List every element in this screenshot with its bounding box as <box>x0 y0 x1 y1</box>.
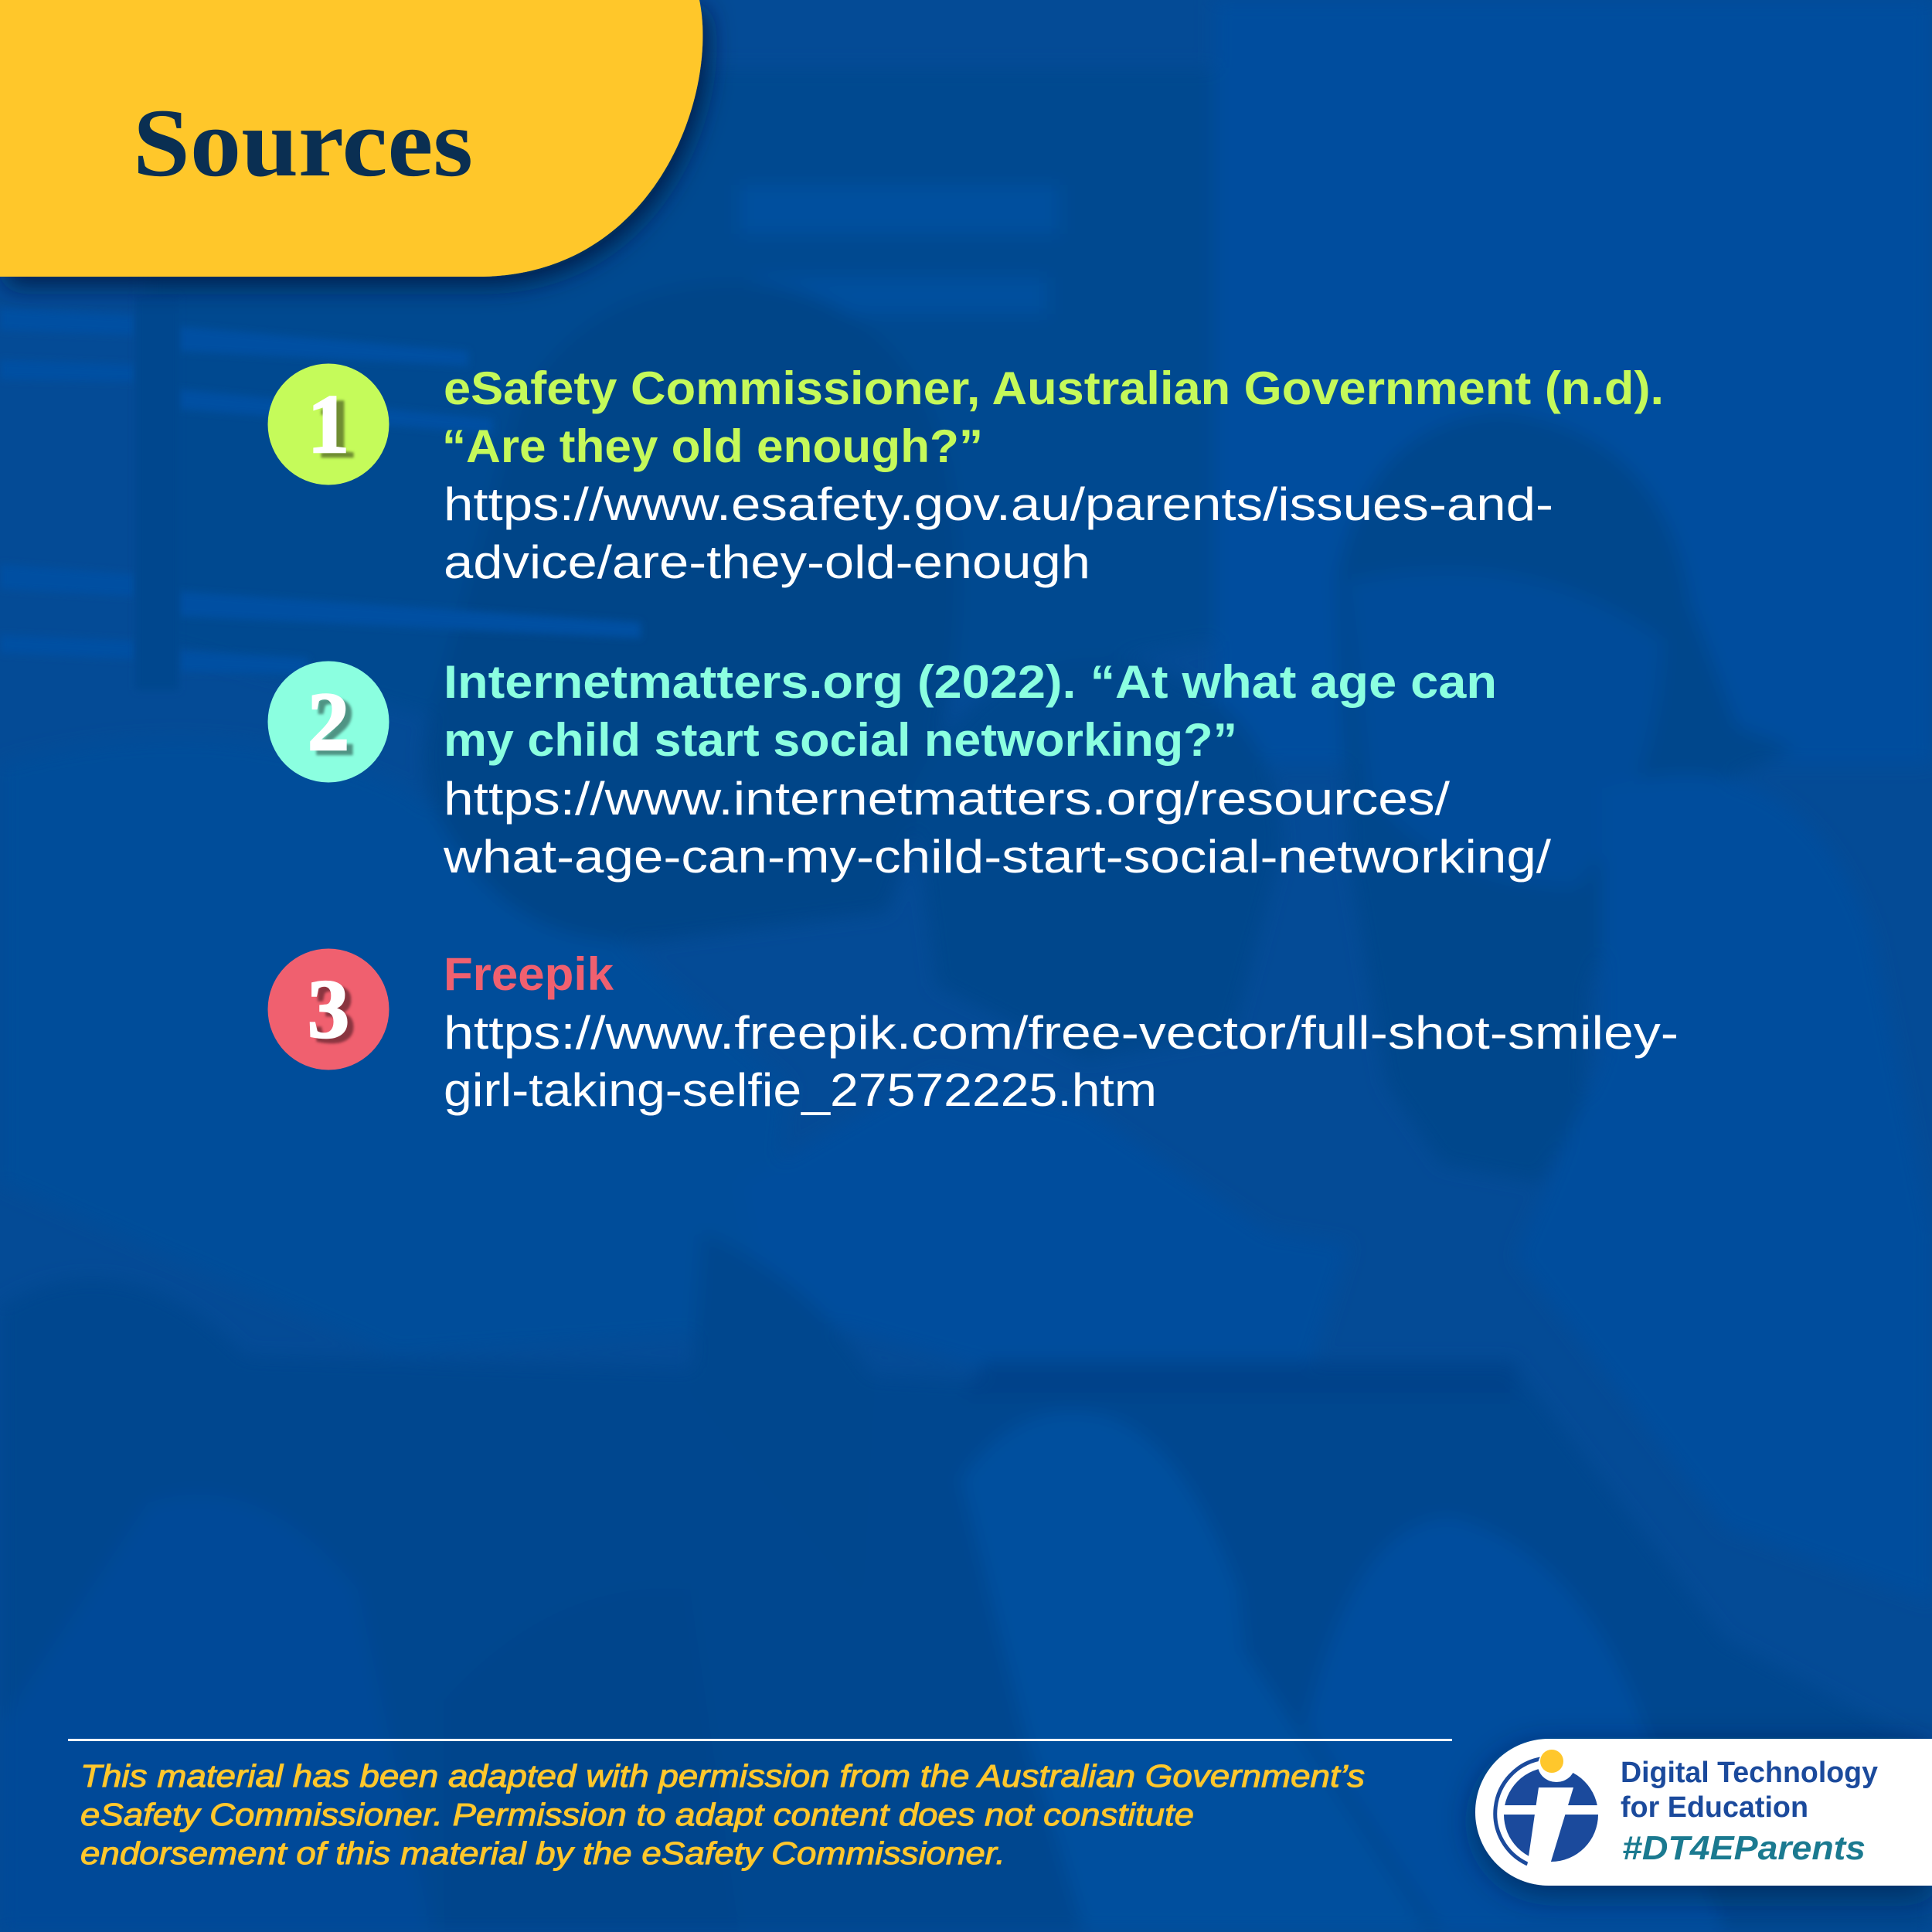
logo text <box>1621 1757 1878 1867</box>
number badge 1: 1 <box>315 383 357 475</box>
source 2 title: Internetmatters.org (2022). “At what age can <box>444 656 1497 708</box>
source 2 title: my child start social networking?” <box>444 714 1237 766</box>
number badge 2 <box>267 662 389 782</box>
number badge 1 <box>267 363 389 485</box>
logo text: #DT4EParents <box>1622 1829 1866 1867</box>
source 1 <box>267 362 1664 588</box>
footer disclaimer: endorsement of this material by the eSafety Commissioner. <box>80 1835 1005 1871</box>
source 2 link: what-age-can-my-child-start-social-networking/ <box>443 831 1551 883</box>
source 2 link: https://www.internetmatters.org/resources/ <box>444 773 1450 825</box>
footer disclaimer: This material has been adapted with permission from the Australian Government’s <box>80 1758 1365 1794</box>
logo text: Digital Technology <box>1621 1757 1878 1789</box>
number badge 3: 3 <box>314 968 355 1060</box>
source 1 title: “Are they old enough?” <box>442 420 983 472</box>
source 1 link: https://www.esafety.gov.au/parents/issues-and- <box>444 478 1553 530</box>
logo text: for Education <box>1621 1791 1808 1824</box>
source 3 link <box>444 1007 1679 1116</box>
icon: Digital Technology for Education logo <box>1495 1748 1604 1867</box>
source 2 title <box>444 656 1497 766</box>
source 2 <box>267 656 1551 883</box>
source 3 link: girl-taking-selfie_27572225.htm <box>444 1064 1157 1116</box>
title tab <box>0 0 702 277</box>
number badge 3 <box>267 949 389 1070</box>
source 3 link: https://www.freepik.com/free-vector/full-shot-smiley- <box>444 1007 1679 1059</box>
source 1 link: advice/are-they-old-enough <box>444 536 1090 588</box>
number badge 2: 2 <box>308 676 349 768</box>
source 3 title: Freepik <box>444 948 614 1000</box>
source 2 link <box>443 773 1551 883</box>
number badge 2: 2 <box>314 681 355 773</box>
logo panel <box>1475 1739 1932 1886</box>
heading: Sources: Sources <box>133 90 473 197</box>
number badge 1: 1 <box>308 379 349 471</box>
footer disclaimer: eSafety Commissioner. Permission to adapt content does not constitute <box>80 1797 1194 1832</box>
source 3 <box>267 948 1679 1116</box>
source 1 title: eSafety Commissioner, Australian Government (n.d). <box>444 362 1664 414</box>
source 1 link <box>444 478 1553 588</box>
number badge 3: 3 <box>308 964 349 1056</box>
source 1 title <box>442 362 1664 472</box>
footer disclaimer <box>80 1758 1365 1871</box>
